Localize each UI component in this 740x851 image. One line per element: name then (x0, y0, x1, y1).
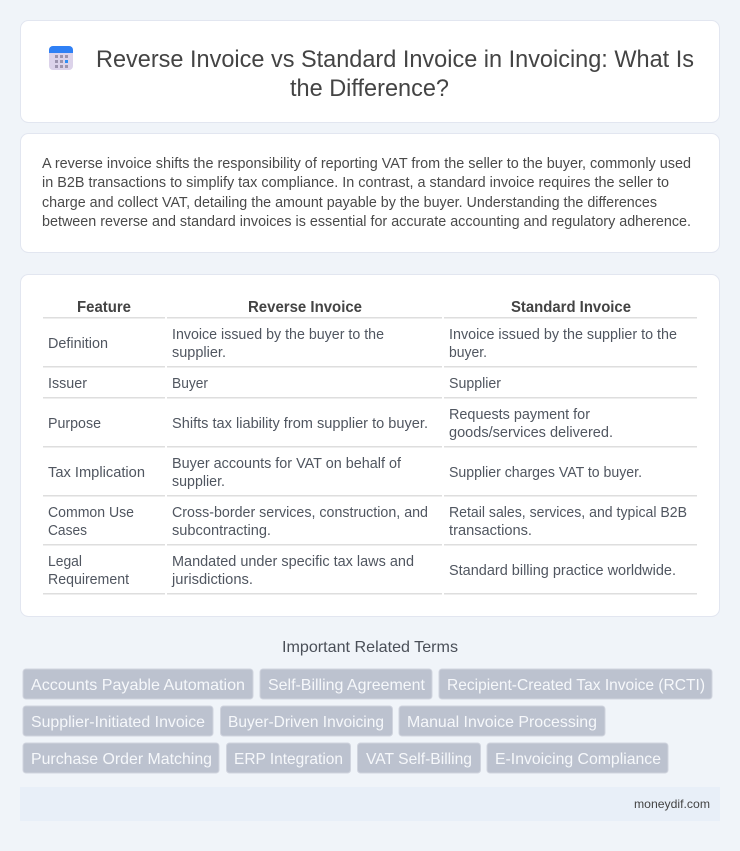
table header row (77, 299, 631, 316)
row: purpose: Purpose (48, 416, 101, 432)
panel: related term tags: Manual Invoice Processing (407, 714, 597, 731)
row: legal requirement: jurisdictions. (171, 572, 253, 588)
title: Reverse Invoice vs Standard Invoice in Invoicing: What Is (96, 46, 694, 73)
row: common use cases: Common Use (48, 505, 134, 521)
heading: related terms: Important Related Terms (282, 639, 458, 656)
row: definition: Invoice issued by the buyer to the (172, 327, 384, 343)
panel: header (20, 20, 720, 122)
intro paragraph: between reverse and standard invoices is essential for accurate accounting and regulatory adherence. (42, 214, 691, 230)
row: purpose: goods/services delivered. (449, 425, 613, 441)
panel: related term tags: Self-Billing Agreement (268, 677, 426, 694)
row: common use cases: Cross-border services, construction, and (172, 505, 428, 521)
row: definition: Invoice issued by the supplier to the (449, 327, 677, 343)
row: issuer: Issuer (48, 376, 87, 392)
row: common use cases: Cases (48, 523, 87, 539)
table header row: Standard Invoice (511, 299, 631, 316)
row: legal requirement: Standard billing practice worldwide. (449, 563, 676, 579)
panel: related term tags (23, 669, 712, 773)
intro paragraph: charge and collect VAT, detailing the amount payable by the buyer. Understanding the differences (42, 195, 657, 211)
panel: related term tags: Buyer-Driven Invoicing (228, 714, 384, 731)
panel: comparison table (20, 274, 720, 616)
row: legal requirement (48, 554, 676, 588)
panel: related term tags: Purchase Order Matching (31, 751, 212, 768)
row: tax implication: Tax Implication (48, 465, 145, 481)
table header row: Reverse Invoice (248, 299, 362, 316)
row: common use cases (48, 505, 687, 539)
panel: introduction (20, 134, 720, 252)
row: tax implication: Supplier charges VAT to buyer. (449, 465, 642, 481)
row: common use cases: Retail sales, services, and typical B2B (449, 505, 687, 521)
row: common use cases: subcontracting. (172, 523, 271, 539)
row: tax implication: supplier. (172, 474, 225, 490)
panel: related term tags: Recipient-Created Tax Invoice (RCTI) (447, 677, 705, 694)
intro paragraph: in B2B transactions to simplify tax compliance. In contrast, a standard invoice requires the seller to (42, 175, 669, 191)
panel: related term tags: Supplier-Initiated Invoice (31, 714, 205, 731)
row: legal requirement: Mandated under specific tax laws and (172, 554, 414, 570)
row: tax implication: Buyer accounts for VAT on behalf of (172, 456, 402, 472)
title (96, 46, 694, 102)
row: common use cases: transactions. (449, 523, 532, 539)
row: issuer (48, 376, 501, 392)
title: the Difference? (290, 75, 449, 102)
row: definition: Definition (48, 336, 108, 352)
row: issuer: Supplier (449, 376, 501, 392)
row: purpose: Shifts tax liability from supplier to buyer. (172, 416, 428, 432)
panel: related term tags: Accounts Payable Automation (31, 677, 245, 694)
table header row: Feature (77, 299, 131, 316)
row: purpose (48, 407, 613, 441)
footer (20, 787, 720, 821)
row: legal requirement: Requirement (48, 572, 129, 588)
intro paragraph (42, 156, 691, 230)
row: issuer: Buyer (172, 376, 208, 392)
row: purpose: Requests payment for (449, 407, 590, 423)
footer: moneydif.com (634, 797, 710, 811)
row: definition: supplier. (172, 345, 226, 361)
panel: related term tags: E-Invoicing Compliance (495, 751, 661, 768)
row: legal requirement: Legal (48, 554, 82, 570)
icon: calendar (49, 46, 73, 70)
panel: related term tags: VAT Self-Billing (366, 751, 472, 768)
intro paragraph: A reverse invoice shifts the responsibility of reporting VAT from the seller to the buyer, commonly used (42, 156, 691, 172)
panel: related term tags: ERP Integration (234, 751, 343, 768)
row: definition (48, 327, 677, 361)
row: tax implication (48, 456, 642, 490)
row: definition: buyer. (449, 345, 487, 361)
